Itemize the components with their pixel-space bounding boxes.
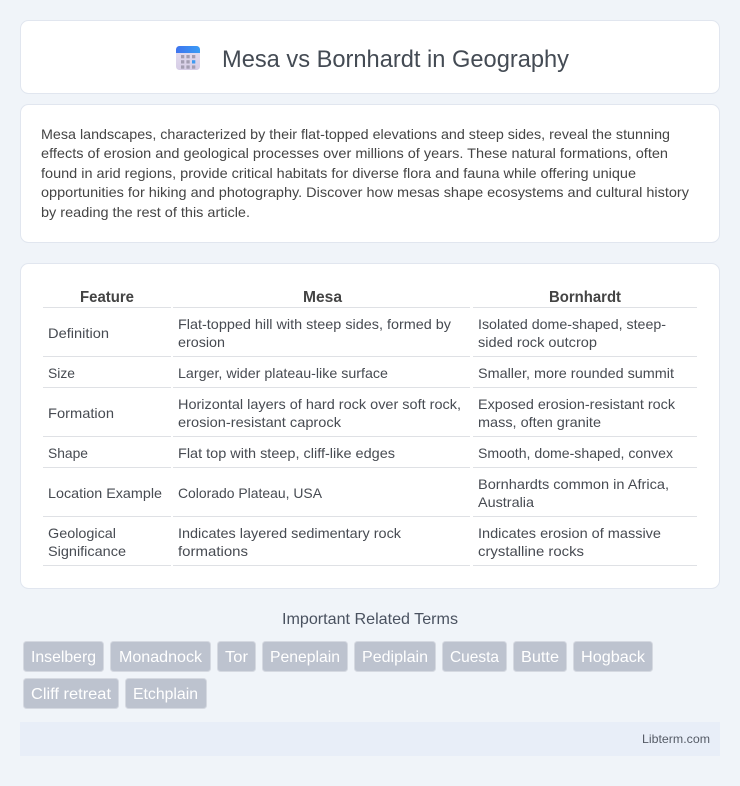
related terms tags: Etchplain [133,686,198,703]
row: definition: sided rock outcrop [478,334,597,350]
related terms tags: Butte [521,649,559,666]
intro text: found in arid regions, provide critical habitats for diverse flora and fauna while offering unique [41,165,636,181]
row: geological significance: Indicates layered sedimentary rock [178,525,402,541]
related terms tags: Pediplain [362,649,428,666]
row: geological significance: formations [178,543,248,559]
row: definition: Flat-topped hill with steep sides, formed by [178,316,451,332]
row: shape [48,445,673,461]
row: shape: Smooth, dome-shaped, convex [478,445,673,461]
related terms tags: Inselberg [31,649,96,666]
row: location example [48,476,669,510]
row: geological significance: Significance [48,543,126,559]
related terms tags: Monadnock [119,649,203,666]
table header row: Feature [80,289,134,306]
row: formation [48,396,676,430]
row: shape: Shape [48,445,88,461]
row: size: Size [48,365,75,381]
intro text: Mesa landscapes, characterized by their flat-topped elevations and steep sides, reveal the stunning [41,126,670,142]
row: location example: Australia [478,494,534,510]
related terms tags [24,642,652,708]
row: formation: Horizontal layers of hard rock over soft rock, [178,396,461,412]
row: size [48,365,674,381]
row: formation: erosion-resistant caprock [178,414,342,430]
row: size: Larger, wider plateau-like surface [178,365,388,381]
footer [20,722,720,756]
row: geological significance [48,525,661,559]
header card [20,20,720,94]
row: location example: Location Example [48,485,162,501]
related terms tags: Peneplain [270,649,340,666]
related terms tags: Tor [225,649,249,666]
row: formation: mass, often granite [478,414,601,430]
table header row [80,289,622,306]
related terms tags: Hogback [581,649,646,666]
comparison table panel [20,264,720,588]
row: location example: Colorado Plateau, USA [178,485,323,501]
intro panel [20,104,720,242]
row: size: Smaller, more rounded summit [478,365,674,381]
row: formation: Exposed erosion-resistant rock [478,396,676,412]
intro text: effects of erosion and geological processes over millions of years. These natural formations, often [41,145,668,161]
related terms tags: Cuesta [450,649,499,666]
row: definition: Isolated dome-shaped, steep- [478,316,666,332]
footer: Libterm.com [642,732,710,746]
row: definition: erosion [178,334,225,350]
table header row: Mesa [303,289,342,306]
row: definition [48,316,666,350]
row: shape: Flat top with steep, cliff-like edges [178,445,395,461]
table header row: Bornhardt [549,289,622,306]
row: geological significance: Geological [48,525,116,541]
row: definition: Definition [48,325,109,341]
title: Mesa vs Bornhardt in Geography [222,46,569,73]
related terms heading: Important Related Terms [282,611,458,628]
row: geological significance: Indicates erosion of massive [478,525,661,541]
intro text: opportunities for hiking and photography. Discover how mesas shape ecosystems and cultural history [41,184,689,200]
intro text: by reading the rest of this article. [41,204,250,220]
intro text [41,126,689,220]
row: geological significance: crystalline rocks [478,543,584,559]
row: formation: Formation [48,405,114,421]
row: location example: Bornhardts common in Africa, [478,476,669,492]
icon: calendar [176,46,200,70]
related terms tags: Cliff retreat [31,686,112,703]
